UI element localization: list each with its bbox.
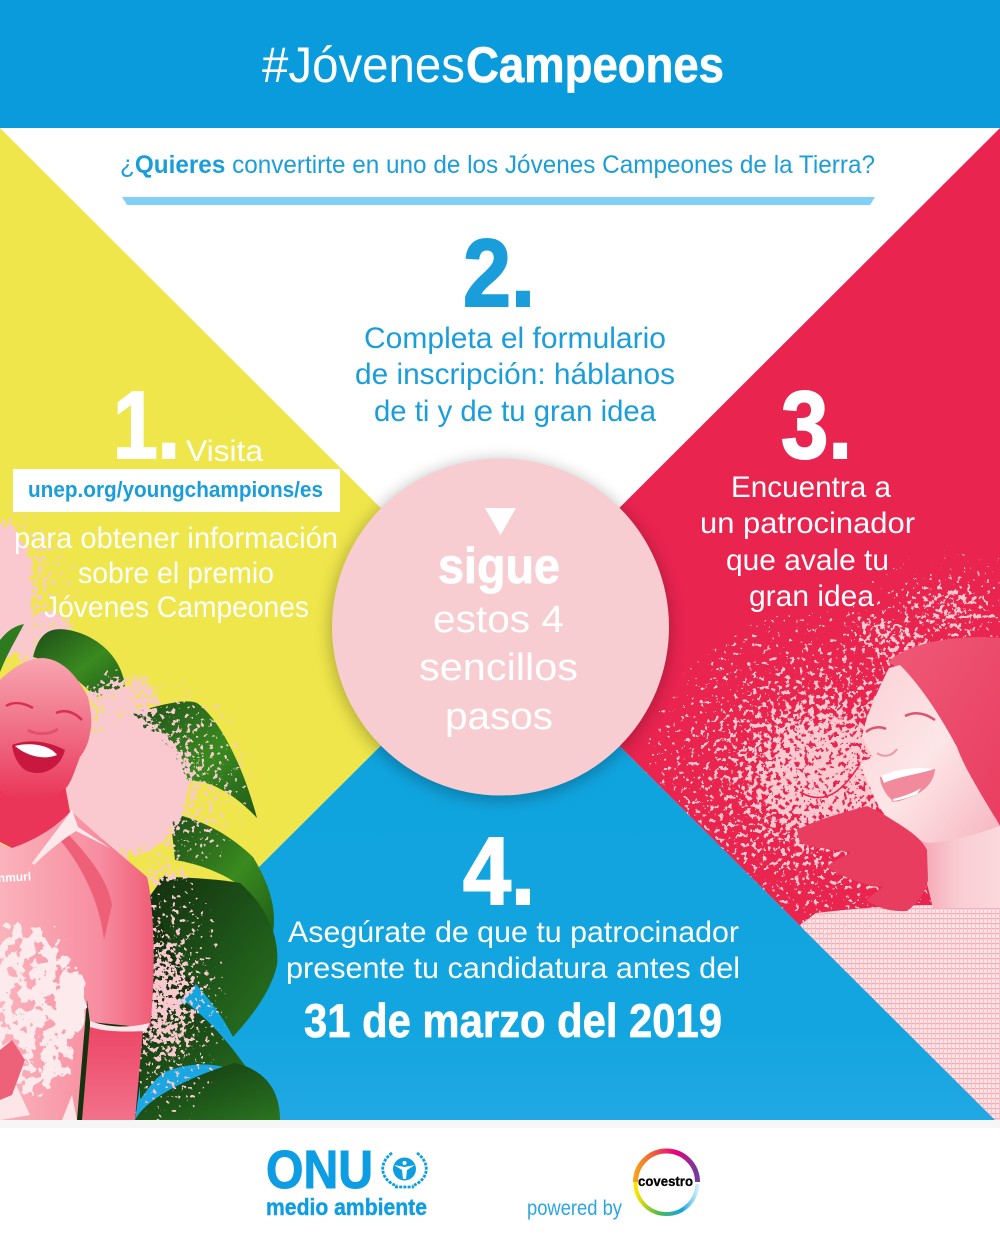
arm [82, 1025, 143, 1120]
panel: centre circle shadow [330, 460, 670, 800]
step 2 text: de inscripción: háblanos [355, 358, 675, 391]
eyes [6, 703, 82, 720]
shirt light print [0, 922, 88, 1097]
neck [915, 815, 1000, 908]
shirt stripe [60, 834, 112, 940]
header title: #Jóvenes [262, 37, 465, 93]
url box [13, 469, 340, 512]
pink particle cloud over leaves [66, 669, 254, 1120]
leaves [0, 624, 280, 1120]
circle text: sencillos [419, 647, 578, 689]
photo: laughing woman with dispersing particles [645, 550, 1000, 1125]
icon: UNEP emblem [383, 1153, 426, 1187]
collar [32, 810, 110, 865]
photo: plant leaves and man with dispersing particles [0, 500, 280, 1135]
head [0, 658, 91, 800]
step 3 text: que avale tu [726, 544, 889, 577]
url box: unep.org/youngchampions/es [28, 477, 323, 502]
step 3 text: Encuentra a [731, 471, 891, 504]
step 3 [700, 372, 915, 613]
number 3: 3. [781, 372, 852, 479]
question intro: ¿Quieres convertirte en uno de los Jóvenes Campeones de la Tierra? [120, 151, 875, 179]
step 3 text: gran idea [749, 580, 874, 613]
header title [262, 37, 724, 93]
step 3 text: un patrocinador [700, 507, 915, 540]
decorative bar [122, 197, 875, 205]
man [0, 658, 154, 1120]
step 1 text: para obtener información [14, 522, 338, 555]
dark backing behind man [75, 875, 195, 1120]
panel: yellow triangle step 1 [0, 128, 500, 1125]
closed eyes [866, 713, 935, 732]
pink particle burst [645, 550, 1000, 940]
number 4: 4. [463, 818, 535, 925]
shirt torso and sleeve [0, 812, 154, 1120]
circle text: sigue [438, 538, 560, 594]
panel: blue triangle step 4 [5, 627, 995, 1120]
icon: down triangle [485, 508, 516, 535]
logo: ONU medio ambiente [266, 1140, 427, 1220]
circle text: estos 4 [433, 599, 564, 641]
logo: ONU medio ambiente: medio ambiente [266, 1194, 427, 1220]
pink particles top left [0, 500, 80, 680]
step 1 text [14, 522, 338, 624]
deadline: 31 de marzo del 2019 [304, 994, 722, 1047]
footer shadow [0, 1120, 1000, 1128]
step 1 [13, 372, 340, 624]
logo: ONU medio ambiente: ONU [266, 1140, 373, 1200]
logo: covestro: covestro [638, 1173, 693, 1189]
mouth [880, 769, 935, 802]
header band [0, 0, 1000, 128]
step 3 text [700, 471, 915, 613]
sleeve cuff [90, 1021, 150, 1032]
visita: Visita [186, 435, 263, 468]
circle text [419, 538, 578, 738]
hair back [888, 637, 1000, 826]
step 1 text: sobre el premio [78, 557, 274, 590]
flying hair strands [797, 806, 928, 911]
number 2: 2. [463, 220, 535, 327]
nose [877, 749, 897, 756]
step 2 text: Completa el formulario [364, 322, 666, 355]
number 1: 1. [113, 372, 180, 479]
panel: centre circle [332, 458, 669, 796]
header title: Campeones [466, 37, 724, 93]
circle text: pasos [445, 696, 553, 738]
face [860, 665, 1000, 843]
shirt graphic [0, 1040, 25, 1100]
powered by: powered by [527, 1197, 622, 1220]
logo: covestro [635, 1151, 698, 1214]
smile [12, 741, 65, 773]
panel: red triangle step 3 [500, 128, 1000, 1125]
neck [0, 788, 70, 848]
step 2 [355, 220, 675, 428]
step 4 text: Asegúrate de que tu patrocinador [288, 916, 739, 949]
step 4 [286, 818, 740, 1047]
step 2 text: de ti y de tu gran idea [374, 395, 656, 428]
step 2 text [355, 322, 675, 428]
step 4 text [286, 916, 740, 985]
step 1 text: Jóvenes Campeones [44, 591, 309, 624]
sweater [800, 905, 1000, 1125]
step 4 text: presente tu candidatura antes del [286, 952, 740, 985]
